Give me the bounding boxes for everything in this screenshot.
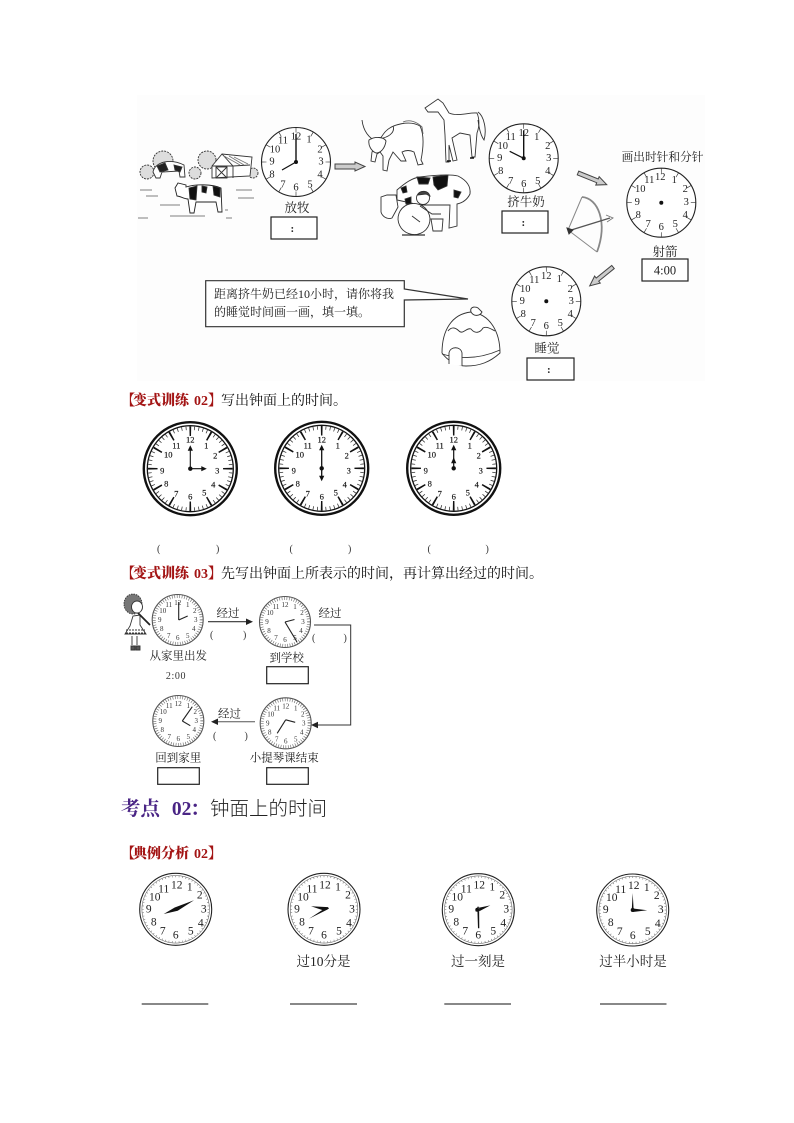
clock: milking 10:00 (489, 124, 558, 193)
clock: arrive school: 7 (274, 634, 278, 642)
clock: leave home 2:00: 5 (186, 632, 190, 640)
clock: example face 3: 8 (453, 917, 459, 929)
arrow: home to school: 经过 (216, 606, 240, 620)
heading: exam point 02: 02 (167, 799, 191, 820)
clock: variant 02 face 2, 6:00: 9 (292, 465, 296, 475)
clock: milking 10:00: 1 (534, 132, 539, 143)
clock: archery blank face: 11 (644, 175, 654, 186)
clock: variant 02 face 3, 12:00: 5 (466, 487, 470, 497)
clock: archery blank face: 1 (672, 175, 677, 186)
heading: variant training 03 (121, 565, 543, 582)
clock: arrive school: 11 (273, 603, 280, 611)
arrow: lesson end to home (211, 706, 255, 742)
heading: worked example 02: 【 (121, 847, 135, 862)
clock: herding 8:00: 10 (270, 144, 280, 156)
clock: archery blank face: 10 (635, 184, 646, 195)
label: lesson end with box (250, 750, 319, 784)
heading: worked example 02: 典例分析 (133, 845, 189, 862)
arrow: school to lesson end: ( (312, 633, 316, 644)
clock: leave home 2:00: 7 (167, 632, 171, 640)
clock: example face 2: 10 (297, 891, 309, 903)
clock: violin lesson ends (260, 698, 311, 749)
clock: sleep blank face: 4 (568, 309, 574, 320)
clock: arrive school: 9 (265, 618, 269, 626)
illustration: bull (362, 120, 423, 171)
clock: variant 02 face 1, 3:00: 2 (213, 451, 217, 461)
callout: speech bubble: 距离挤牛奶已经10小时，请你将我 (214, 286, 394, 301)
clock: variant 02 face 3, 12:00: 7 (438, 488, 442, 498)
clock: milking 10:00: 3 (546, 153, 551, 164)
clock: example face 2: 2 (345, 889, 351, 901)
clock: milking 10:00: 4 (545, 166, 551, 177)
clock: milking 10:00: 5 (535, 176, 540, 187)
clock: example face 1 (140, 873, 212, 945)
clock: back home: 3 (195, 717, 199, 725)
clock: violin lesson ends: 7 (275, 735, 279, 743)
clock: arrive school: 6 (283, 636, 287, 644)
clock: milking 10:00: 6 (521, 179, 526, 190)
heading: variant training 03: 先写出钟面上所表示的时间，再计算出经过的时间。 (221, 565, 543, 582)
clock: example face 2: 5 (336, 925, 342, 937)
clock: leave home 2:00: 9 (158, 616, 162, 624)
clock: variant 02 face 2, 6:00: 7 (306, 488, 310, 498)
clock: archery blank face: 3 (684, 197, 689, 208)
heading: variant training 03: 】 (208, 566, 222, 582)
clock: arrive school: 1 (293, 603, 297, 611)
clock: example face 3: 9 (448, 904, 454, 916)
clock: violin lesson ends: 5 (294, 735, 298, 743)
clock: example face 2 (288, 873, 360, 945)
clock: example face 3: 12 (474, 880, 485, 892)
clock: violin lesson ends: 2 (301, 710, 305, 718)
clock: arrive school: 3 (301, 618, 305, 626)
clock: example face 4: 10 (606, 892, 618, 904)
label: back home with box: 回到家里 (155, 750, 202, 764)
clock: sleep blank face: 1 (557, 274, 562, 285)
clock: sleep blank face: 10 (520, 284, 531, 295)
clock: back home: 10 (160, 708, 167, 716)
heading: exam point 02: 钟面上的时间 (210, 792, 327, 821)
clock: example face 1: 8 (151, 916, 157, 928)
clock: back home: 8 (161, 726, 165, 734)
clock: example face 1: 9 (146, 903, 152, 915)
clock: herding 8:00: 1 (306, 134, 312, 146)
clock: example face 4: 4 (655, 918, 661, 930)
clock: variant 02 face 1, 3:00: 3 (215, 466, 219, 476)
arrow: school to lesson end: ) (344, 633, 347, 644)
clock: leave home 2:00: 4 (192, 625, 196, 633)
clock: back home: 12 (175, 700, 182, 708)
arrow: lesson end to home: ) (244, 731, 248, 742)
clock: example face 1: 4 (198, 917, 204, 929)
clock: archery blank face: 4 (683, 210, 689, 221)
clock: example face 4: 1 (644, 882, 650, 894)
heading: exam point 02 (121, 792, 327, 821)
clock: back home: 5 (187, 733, 191, 741)
clock: variant 02 face 1, 3:00: 11 (172, 441, 180, 451)
label: leave home at 2:00 (150, 648, 208, 682)
clock: variant 02 face 1, 3:00: 12 (186, 435, 195, 445)
illustration: farm with cows and barn (138, 151, 258, 218)
clock: variant 02 face 2, 6:00: 11 (304, 440, 312, 450)
answer brackets: variant 02: ) (486, 544, 489, 555)
clock: archery blank face: 7 (646, 219, 651, 230)
clock: archery blank face: 12 (655, 172, 666, 183)
label: 射箭 with time 4:00: 4:00 (654, 264, 676, 278)
clock: back home: 7 (168, 733, 172, 741)
clock: leave home 2:00: 10 (159, 607, 167, 615)
label: lesson end with box: 小提琴课结束 (250, 750, 319, 764)
clock: violin lesson ends: 1 (294, 704, 298, 712)
clock: example face 4: 11 (615, 884, 626, 896)
clock: arrive school: 4 (299, 627, 303, 635)
clock: archery blank face: 6 (659, 222, 664, 233)
clock: herding 8:00: 4 (317, 170, 323, 180)
clock: example face 1: 5 (188, 925, 194, 937)
clock: archery blank face: 8 (636, 210, 641, 221)
clock: example face 3: 2 (499, 890, 505, 902)
label: back home with box (155, 750, 202, 784)
clock: example face 3: 11 (461, 884, 472, 896)
clock: variant 02 face 1, 3:00: 9 (160, 466, 164, 476)
clock: variant 02 face 3, 12:00: 11 (436, 440, 444, 450)
clock: variant 02 face 2, 6:00: 5 (334, 487, 338, 497)
answer lines: worked example (142, 1003, 666, 1005)
clock: example face 2: 11 (306, 883, 318, 895)
clock: variant 02 face 2, 6:00: 12 (317, 434, 326, 444)
clock: arrive school (260, 596, 310, 648)
clock: sleep blank face: 6 (544, 321, 549, 332)
clock: variant 02 face 2, 6:00: 2 (345, 450, 349, 460)
arrow: lesson end to home: 经过 (218, 706, 241, 720)
label: 放牧 with time box: 放牧 (284, 200, 310, 215)
arrow: school to lesson end: 经过 (318, 606, 342, 620)
heading: variant training 02: 【 (121, 394, 135, 409)
clock: variant 02 face 3, 12:00: 1 (468, 440, 472, 450)
heading: variant training 02: 02 (194, 394, 208, 409)
callout: speech bubble: 的睡觉时间画一画，填一填。 (214, 304, 370, 319)
clock: archery blank face (627, 168, 696, 237)
text: draw the hour and minute hands: 画出时针和分针 (622, 150, 704, 164)
clock: variant 02 face 2, 6:00: 4 (343, 479, 348, 489)
clock: variant 02 face 2, 6:00: 1 (336, 440, 340, 450)
clock: back home: 9 (159, 717, 163, 725)
clock: arrive school: 8 (267, 627, 271, 635)
clock: variant 02 face 2, 6:00: 8 (296, 478, 300, 488)
heading: variant training 02: 变式训练 (133, 392, 191, 409)
clock: herding 8:00: 2 (317, 144, 323, 156)
clock: example face 4: 2 (654, 890, 660, 902)
callout: speech bubble (206, 281, 468, 327)
clock: herding 8:00: 8 (269, 170, 275, 180)
clock: example face 4: 6 (630, 930, 636, 942)
clock: example face 1: 10 (149, 891, 161, 903)
clock: example face 2: 9 (294, 903, 300, 915)
illustration: cow being milked (381, 175, 470, 239)
clock: leave home 2:00: 11 (165, 601, 173, 609)
clock: example face 4: 9 (603, 904, 609, 916)
clock: variant 02 face 1, 3:00: 6 (188, 492, 192, 502)
clock: milking 10:00: 2 (545, 141, 550, 152)
clock: example face 4: 7 (617, 926, 623, 938)
clock: leave home 2:00: 1 (186, 601, 190, 609)
clock: example face 2: 12 (319, 879, 331, 891)
clock: example face 1: 12 (171, 879, 183, 891)
clock: example face 2: 7 (308, 925, 314, 937)
clock: back home: 1 (187, 702, 191, 710)
clock: violin lesson ends: 4 (300, 728, 304, 736)
clock: example face 3: 7 (462, 926, 468, 938)
clock: archery blank face: 5 (673, 219, 678, 230)
clock: example face 4: 12 (628, 880, 640, 892)
clock: milking 10:00: 11 (506, 132, 516, 143)
clock: example face 4: 8 (608, 917, 614, 929)
clock: milking 10:00: 12 (518, 128, 529, 139)
illustration: girl with violin (124, 594, 150, 650)
clock: variant 02 face 2, 6:00 (275, 422, 368, 515)
clock: variant 02 face 1, 3:00: 8 (164, 479, 168, 489)
clock: herding 8:00: 11 (278, 136, 288, 146)
clock: violin lesson ends: 9 (266, 719, 270, 727)
arrow: school to lesson end (311, 606, 351, 728)
label: 过半小时是: 过半小时是 (599, 953, 667, 969)
clock: arrive school: 10 (266, 609, 274, 617)
clock: variant 02 face 3, 12:00: 2 (477, 450, 481, 460)
arrow: to sleep (587, 264, 616, 289)
clock: variant 02 face 3, 12:00: 9 (424, 465, 428, 475)
clock: sleep blank face: 12 (541, 271, 552, 282)
answer brackets: variant 02: ( (290, 544, 294, 555)
clock: example face 2: 1 (335, 881, 341, 893)
clock: herding 8:00: 6 (293, 182, 299, 194)
clock: variant 02 face 1, 3:00: 4 (211, 480, 216, 490)
clock: variant 02 face 1, 3:00 (144, 422, 237, 515)
clock: example face 2: 3 (349, 903, 355, 915)
clock: sleep blank face: 7 (531, 318, 536, 329)
label: 射箭 with time 4:00 (642, 245, 688, 281)
clock: variant 02 face 3, 12:00: 4 (475, 479, 480, 489)
clock: sleep blank face: 2 (568, 284, 573, 295)
clock: leave home 2:00: 12 (174, 599, 182, 607)
heading: variant training 03: 03 (194, 567, 208, 582)
answer brackets: variant 02: ) (348, 544, 351, 555)
clock: herding 8:00: 9 (269, 156, 275, 168)
clock: leave home 2:00: 8 (160, 625, 164, 633)
clock: variant 02 face 3, 12:00: 12 (449, 434, 458, 444)
panel: herding timeline puzzle (138, 99, 704, 380)
arrow: to milking (335, 162, 365, 171)
clock: variant 02 face 1, 3:00: 1 (204, 441, 208, 451)
clock: example face 4: 5 (645, 926, 651, 938)
heading: exam point 02: 考点 (121, 799, 160, 820)
label: 挤牛奶 with time box (502, 194, 548, 233)
heading: exam point 02: ： (190, 799, 210, 820)
label: 挤牛奶 with time box: 挤牛奶 (507, 194, 545, 209)
clock: example face 2: 4 (346, 917, 352, 929)
clock: example face 1: 7 (160, 925, 166, 937)
clock: variant 02 face 2, 6:00: 10 (295, 449, 304, 459)
answer brackets: variant 02: ( (428, 544, 432, 555)
clock: sleep blank face (512, 267, 581, 336)
clock: arrive school: 2 (300, 609, 304, 617)
clock: herding 8:00: 12 (291, 132, 301, 142)
clock: example face 2: 8 (299, 916, 305, 928)
clock: variant 02 face 1, 3:00: 7 (174, 489, 178, 499)
answer brackets: variant 02: ) (216, 544, 219, 555)
clock: example face 1: 6 (173, 929, 179, 941)
answer brackets: variant 02 (157, 544, 489, 555)
arrow: to archery (576, 169, 608, 189)
clock: sleep blank face: 3 (569, 296, 574, 307)
clock: example face 3 (442, 874, 514, 946)
label: 放牧 with time box: : (290, 223, 294, 235)
answer brackets: variant 02: ( (157, 544, 161, 555)
label: arrive school with box: 到学校 (269, 650, 304, 664)
clock: example face 3: 5 (490, 926, 496, 938)
arrow: lesson end to home: ( (213, 731, 217, 742)
clock: milking 10:00: 9 (497, 153, 502, 164)
illustration: horse (425, 99, 485, 162)
clock: variant 02 face 3, 12:00: 6 (452, 491, 456, 501)
clock: example face 1: 11 (158, 883, 169, 895)
label: arrive school with box (267, 650, 308, 684)
clock: variant 02 face 2, 6:00: 3 (347, 465, 351, 475)
arrow: home to school (208, 606, 253, 641)
clock: arrive school: 12 (282, 601, 289, 609)
clock: archery blank face: 9 (635, 197, 640, 208)
clock: example face 4: 3 (658, 904, 664, 916)
clock: sleep blank face: 11 (529, 275, 539, 286)
clock: arrive school: 5 (293, 634, 297, 642)
heading: worked example 02: 】 (208, 846, 222, 862)
clock: violin lesson ends: 8 (268, 728, 272, 736)
illustration: yurt (442, 307, 500, 366)
panel: elapsed time flow (124, 594, 351, 784)
clock: sleep blank face: 9 (520, 296, 525, 307)
clock: example face 3: 3 (503, 904, 509, 916)
clock: variant 02 face 3, 12:00: 3 (479, 465, 483, 475)
clock: variant 02 face 1, 3:00: 10 (164, 450, 173, 460)
clock: example face 3: 6 (475, 930, 481, 942)
clock: milking 10:00: 8 (498, 166, 503, 177)
clock: example face 1: 1 (187, 881, 193, 893)
clock: back home: 6 (177, 735, 181, 743)
clock: herding 8:00: 3 (318, 156, 324, 168)
arrow: home to school: ( (210, 630, 214, 641)
label: leave home at 2:00: 从家里出发 (150, 648, 208, 662)
clock: example face 4 (597, 874, 669, 946)
heading: variant training 02: 】 (208, 393, 222, 409)
clock: violin lesson ends: 3 (302, 719, 306, 727)
label: 睡觉 with time box: 睡觉 (534, 340, 560, 356)
clock: herding 8:00: 5 (307, 180, 313, 190)
clock: herding 8:00 (262, 128, 330, 196)
clock: violin lesson ends: 10 (267, 710, 275, 718)
clock: back home: 11 (166, 702, 173, 710)
label: leave home at 2:00: 2:00 (166, 671, 186, 682)
clock: variant 02 face 3, 12:00: 8 (428, 478, 432, 488)
clock: variant 02 face 3, 12:00 (407, 422, 500, 515)
label: 放牧 with time box (271, 200, 317, 239)
clock: back home: 4 (193, 726, 197, 734)
clock: back home (153, 696, 204, 746)
clock: herding 8:00: 7 (280, 180, 286, 190)
arrow: home to school: ) (243, 630, 246, 641)
clock: example face 3: 1 (489, 882, 495, 894)
clock: leave home 2:00 (152, 594, 203, 646)
label: 睡觉 with time box (527, 340, 574, 380)
label: 过10分是: 过10分是 (296, 954, 351, 969)
clock: variant 02 face 3, 12:00: 10 (427, 449, 436, 459)
heading: variant training 02: 写出钟面上的时间。 (221, 393, 347, 409)
clock: milking 10:00: 10 (497, 141, 508, 152)
label: 挤牛奶 with time box: : (522, 217, 525, 229)
heading: variant training 03: 【 (121, 567, 135, 582)
clock: example face 1: 2 (197, 889, 203, 901)
clock: variant 02 face 1, 3:00: 5 (202, 488, 206, 498)
label: 睡觉 with time box: : (547, 364, 551, 376)
clock: milking 10:00: 7 (508, 176, 513, 187)
clock: example face 3: 10 (452, 892, 463, 904)
clock: leave home 2:00: 2 (193, 607, 197, 615)
clock: violin lesson ends: 11 (273, 704, 281, 712)
clock: sleep blank face: 5 (558, 318, 563, 329)
clock: leave home 2:00: 3 (194, 616, 198, 624)
clock: violin lesson ends: 6 (284, 737, 288, 745)
clock: leave home 2:00: 6 (176, 634, 180, 642)
clock: archery blank face: 2 (683, 184, 688, 195)
clock: example face 1: 3 (201, 903, 207, 915)
illustration: bow and arrow (567, 197, 613, 252)
clock: back home: 2 (194, 708, 198, 716)
heading: worked example 02: 02 (194, 847, 208, 862)
clock: example face 2: 6 (321, 929, 327, 941)
label: 射箭 with time 4:00: 射箭 (652, 245, 678, 259)
heading: variant training 02 (121, 392, 347, 409)
clock: variant 02 face 2, 6:00: 6 (320, 491, 324, 501)
label: 过一刻是: 过一刻是 (451, 954, 505, 969)
clock: violin lesson ends: 12 (282, 702, 290, 710)
heading: variant training 03: 变式训练 (133, 565, 191, 582)
clock: example face 3: 4 (500, 918, 506, 930)
clock: sleep blank face: 8 (521, 309, 526, 320)
